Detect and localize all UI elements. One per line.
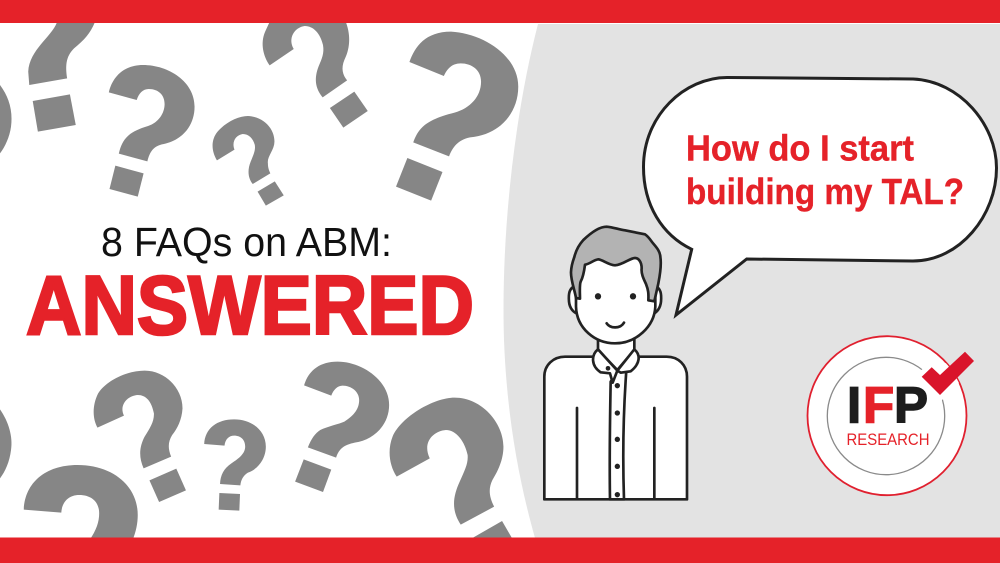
top red band [0,0,1000,23]
bubble text line 2: building my TAL? [686,171,964,212]
bubble text line 1: How do I start [686,128,914,168]
collar right [617,349,639,373]
logo wordmark: F [863,377,894,434]
collar left [593,349,617,383]
heading: ANSWERED: ANSWERED [26,258,474,352]
check gap in rings [922,363,959,400]
face [576,252,655,343]
question marks: top row [0,23,518,206]
speech bubble [644,78,996,315]
sleeve line left [573,408,581,499]
ears [569,286,578,314]
checkmark [922,352,974,395]
bottom red band [0,538,1000,563]
placket [610,366,627,499]
neck [598,338,634,370]
inner ring [827,357,945,475]
heading: 8 FAQs on ABM: 8 FAQs on ABM: [101,219,392,265]
person illustration [544,227,687,499]
shirt body [544,357,687,499]
logo subtitle: RESEARCH [846,431,930,449]
smile [607,323,624,327]
question marks: bottom row [0,362,513,540]
hair [571,227,661,301]
eye left [595,293,601,299]
panel: grey curved background [504,24,1000,538]
logo wordmark: I [847,377,861,434]
buttons [606,366,620,497]
logo: IFP Research [808,336,974,495]
sleeve line right [650,408,658,499]
logo wordmark: P [894,377,928,434]
outer ring [808,336,966,495]
eye right [630,293,636,299]
